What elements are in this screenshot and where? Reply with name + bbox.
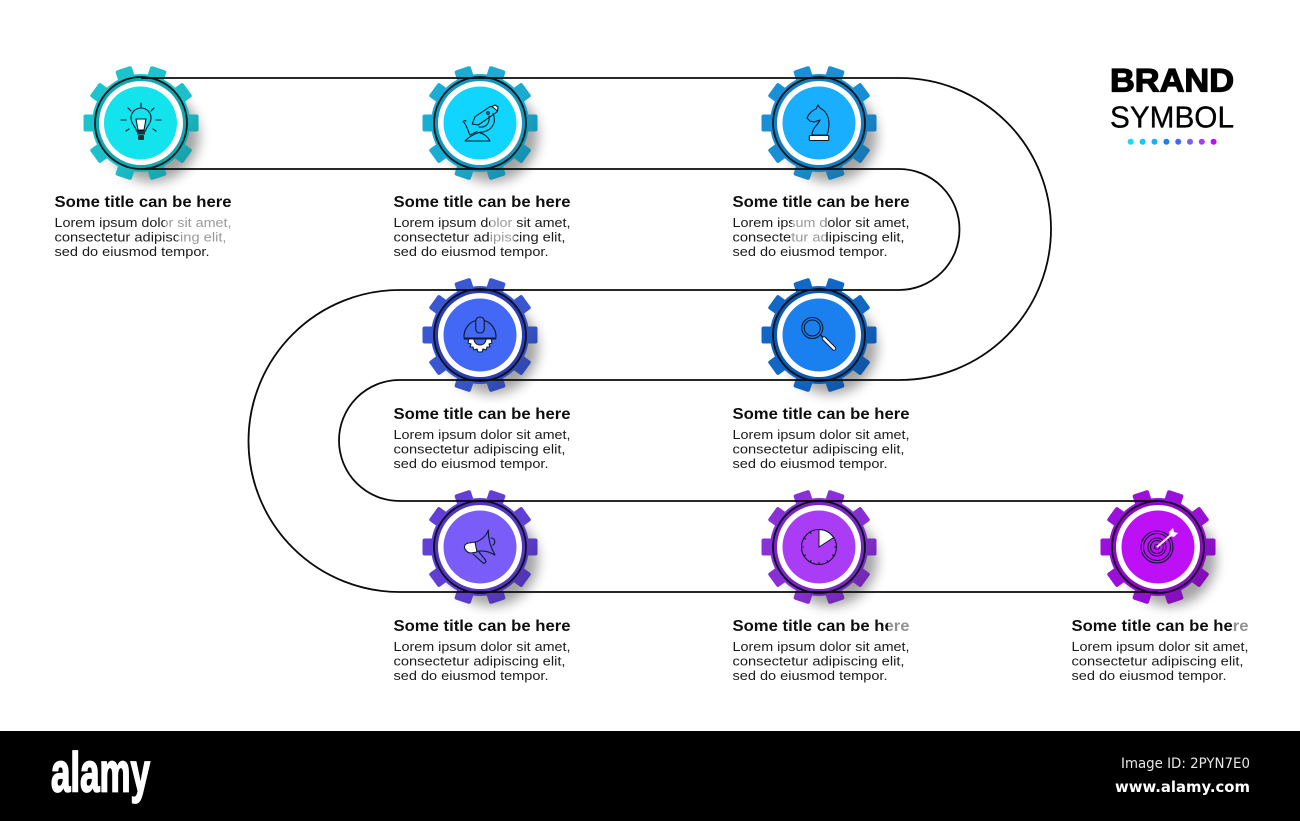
- gear 6: megaphone: [421, 488, 539, 606]
- body text: sed do eiusmod tempor.: [394, 244, 548, 259]
- body text: [394, 639, 570, 683]
- body text: consectetur adipiscing elit,: [394, 230, 565, 244]
- body text: Lorem ipsum dolor sit amet,: [394, 639, 570, 654]
- icon: magnifier: [802, 318, 834, 348]
- body text: [732, 639, 910, 683]
- text block 1: [54, 194, 232, 259]
- text block 7: [732, 618, 910, 683]
- text block 2: [394, 194, 571, 259]
- gear 3: chess knight: [760, 64, 878, 182]
- heading: Some title can be here: [1072, 618, 1249, 635]
- gear 8: target: [1099, 488, 1217, 606]
- body text: Lorem ipsum dolor sit amet,: [732, 215, 909, 230]
- body text: Lorem ipsum dolor sit amet,: [394, 215, 570, 230]
- body text: consectetur adipiscing elit,: [732, 654, 904, 668]
- body text: sed do eiusmod tempor.: [732, 456, 888, 471]
- body text: sed do eiusmod tempor.: [1072, 668, 1226, 683]
- colored dots: [1128, 139, 1217, 145]
- icon: light bulb: [121, 103, 161, 140]
- body text: sed do eiusmod tempor.: [394, 456, 548, 471]
- icon: pie chart timer: [802, 530, 836, 564]
- icon: target with arrow: [1141, 528, 1178, 563]
- icon: microscope: [463, 105, 498, 141]
- heading: Some title can be here: [732, 194, 910, 211]
- text block 6: [394, 618, 571, 683]
- body text: Lorem ipsum dolor sit amet,: [394, 427, 570, 442]
- heading: Some title can be here: [394, 194, 571, 211]
- body text: [394, 427, 570, 471]
- body text: consectetur adipiscing elit,: [732, 230, 904, 244]
- roadmap path line: [141, 78, 1158, 592]
- heading: Some title can be here: [54, 194, 232, 211]
- body text: sed do eiusmod tempor.: [732, 668, 888, 683]
- gear 4: worker helmet: [421, 276, 539, 394]
- symbol word: SYMBOL: [1110, 100, 1234, 134]
- body text: consectetur adipiscing elit,: [54, 230, 226, 244]
- text block 8: [1072, 618, 1249, 683]
- body text: [732, 427, 910, 471]
- body text: consectetur adipiscing elit,: [1072, 654, 1243, 668]
- icon: chess knight: [807, 105, 829, 140]
- body text: Lorem ipsum dolor sit amet,: [54, 215, 231, 230]
- body text: Lorem ipsum dolor sit amet,: [732, 639, 909, 654]
- heading: Some title can be here: [394, 618, 571, 635]
- icon: worker helmet: [464, 317, 496, 352]
- icon: megaphone: [464, 530, 495, 563]
- body text: [54, 215, 231, 259]
- body text: [394, 215, 570, 259]
- heading: Some title can be here: [394, 406, 571, 423]
- text block 3: [732, 194, 910, 259]
- body text: consectetur adipiscing elit,: [732, 442, 904, 456]
- gear 7: pie chart timer: [760, 488, 878, 606]
- body text: [1072, 639, 1248, 683]
- brand word: BRAND: [1110, 62, 1234, 98]
- gear 2: microscope: [421, 64, 539, 182]
- footer bar: [0, 731, 1300, 821]
- body text: Lorem ipsum dolor sit amet,: [732, 427, 909, 442]
- image id: Image ID: 2PYN7E0: [1121, 756, 1250, 772]
- brand logo: [1110, 62, 1234, 145]
- body text: [732, 215, 910, 259]
- body text: sed do eiusmod tempor.: [394, 668, 548, 683]
- heading: Some title can be here: [732, 406, 910, 423]
- body text: sed do eiusmod tempor.: [732, 244, 888, 259]
- body text: Lorem ipsum dolor sit amet,: [1072, 639, 1248, 654]
- text block 4: [394, 406, 571, 471]
- gear 1: light bulb: [82, 64, 200, 182]
- heading: Some title can be here: [732, 618, 910, 635]
- body text: sed do eiusmod tempor.: [54, 244, 210, 259]
- website: www.alamy.com: [1115, 778, 1250, 796]
- body text: consectetur adipiscing elit,: [394, 654, 565, 668]
- footer logo: alamy: [51, 740, 150, 804]
- gear 5: magnifier: [760, 276, 878, 394]
- text block 5: [732, 406, 910, 471]
- body text: consectetur adipiscing elit,: [394, 442, 565, 456]
